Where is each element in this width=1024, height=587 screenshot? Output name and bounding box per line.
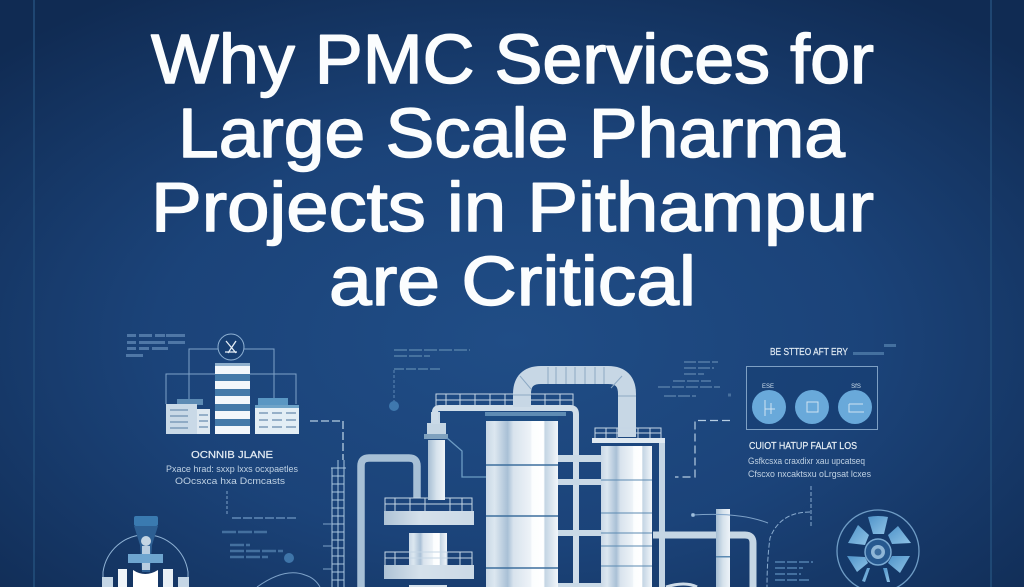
- process plant: [361, 367, 753, 587]
- dashed connector right: [675, 420, 730, 477]
- org chart caption: OCNNIB JLANE: [191, 450, 273, 461]
- curved dashed callout: [692, 486, 813, 587]
- lab apparatus bottom left: [102, 516, 189, 587]
- lower left platform deck: [384, 565, 474, 579]
- connector to main column: [447, 438, 486, 477]
- org chart icon circle: [218, 334, 244, 360]
- circle icon one: [752, 384, 786, 424]
- lower right pipework: [653, 509, 753, 587]
- note lines top left: [126, 334, 185, 357]
- cost text block: Gsfkcsxa craxdixr xau upcatseq: [748, 456, 865, 467]
- cross pipes: [558, 455, 602, 587]
- title: [151, 20, 874, 320]
- annotation above right column: [658, 362, 731, 396]
- title: Large Scale Pharma: [178, 94, 845, 172]
- org chart caption: [166, 450, 298, 487]
- upper left platform deck: [384, 511, 474, 525]
- circle icon three: SfS: [851, 384, 861, 390]
- right column: [601, 443, 665, 587]
- top deck pipe: [435, 408, 576, 587]
- panel: org chart: [126, 334, 299, 487]
- mid block: [409, 533, 447, 565]
- title: are Critical: [329, 242, 696, 320]
- ladder tower: [323, 460, 346, 587]
- arch pipe left: [361, 458, 417, 587]
- small annotation block: [222, 491, 320, 587]
- circle icon three: [838, 384, 872, 424]
- cost text block: [748, 441, 871, 480]
- fan hub: [865, 539, 891, 565]
- fan icon: [837, 510, 919, 587]
- large overhead elbow pipe: [513, 367, 636, 437]
- org chart caption: OOcsxca hxa Dcmcasts: [175, 476, 285, 487]
- slim column: [424, 412, 448, 500]
- cost text block: CUIOT HATUP FALAT LOS: [749, 441, 857, 452]
- dashed connector left: [310, 421, 343, 460]
- org chart connectors: [166, 349, 296, 405]
- title: Why PMC Services for: [151, 20, 874, 98]
- right column railing: [595, 428, 661, 438]
- benefits frame: [746, 366, 878, 430]
- right column deck: [592, 438, 665, 443]
- upper left platform railing: [385, 498, 472, 511]
- circle icon two: [795, 390, 829, 424]
- main vessel: [485, 412, 566, 587]
- benefits heading: BE STTEO AFT ERY: [770, 347, 848, 358]
- circle icon one: ESE: [762, 384, 774, 390]
- left documents: [166, 399, 210, 434]
- center stack: [215, 363, 250, 434]
- panel: benefits box: [746, 344, 896, 430]
- right documents: [255, 398, 299, 434]
- top railing: [436, 394, 573, 407]
- cost text block: Cfscxo nxcaktsxu oLrgsat lcxes: [748, 469, 871, 480]
- org chart caption: Pxace hrad: sxxp lxxs ocxpaetles: [166, 464, 298, 475]
- title: Projects in Pithampur: [151, 168, 874, 246]
- annotation dashes above left column: [389, 350, 470, 411]
- lower left railing: [385, 552, 472, 565]
